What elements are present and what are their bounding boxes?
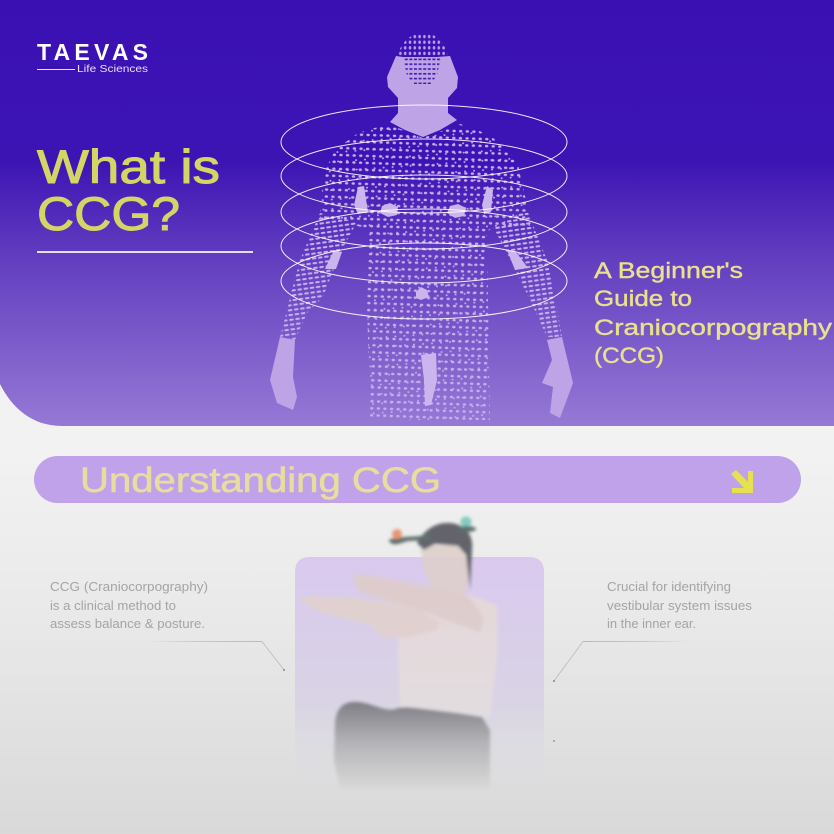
subtitle: Guide to	[594, 286, 692, 311]
left hand	[270, 337, 297, 410]
left description	[50, 580, 208, 631]
title	[37, 140, 220, 240]
pants	[334, 702, 490, 790]
subtitle: Craniocorpography	[594, 315, 833, 340]
woman wearing CCG headset	[298, 516, 498, 790]
human body point cloud	[270, 33, 573, 420]
logo: Taevas Life Sciences: Life Sciences	[77, 63, 148, 75]
orbit rings	[281, 105, 567, 319]
right arm dots	[493, 210, 562, 337]
teal sensor	[460, 516, 472, 528]
left leader line	[150, 642, 285, 671]
right description: vestibular system issues	[607, 599, 752, 613]
torso	[398, 595, 498, 717]
hair	[417, 523, 472, 590]
left description: assess balance & posture.	[50, 617, 205, 631]
right description	[607, 580, 752, 631]
right hand	[542, 337, 573, 418]
title: CCG?	[37, 187, 180, 240]
upper arm raised	[352, 574, 484, 632]
subtitle	[594, 258, 833, 368]
subtitle: (CCG)	[594, 343, 664, 368]
title underline	[37, 251, 253, 253]
panel: photo card	[295, 557, 544, 805]
face and neck	[420, 545, 472, 600]
hero panel	[0, 0, 834, 426]
solid patches	[325, 186, 528, 406]
headset base	[458, 526, 476, 532]
face dots	[403, 57, 441, 84]
orange sensor	[392, 529, 402, 539]
head and neck solid	[387, 56, 458, 137]
right description: Crucial for identifying	[607, 580, 731, 594]
icon: arrow	[731, 470, 753, 493]
logo: Taevas Life Sciences: TAEVAS	[37, 39, 148, 65]
head top dots	[397, 33, 448, 57]
right description: in the inner ear.	[607, 617, 696, 631]
left description: is a clinical method to	[50, 599, 176, 613]
title: What is	[37, 140, 220, 193]
torso dots	[320, 124, 530, 420]
left arm dots	[280, 213, 357, 340]
right leader line	[553, 642, 688, 742]
banner heading: Understanding CCG	[80, 461, 441, 500]
lower arm raised	[298, 596, 440, 638]
left description: CCG (Craniocorpography)	[50, 580, 208, 594]
headset arm	[389, 533, 430, 544]
section banner	[34, 456, 801, 503]
subtitle: A Beginner's	[594, 258, 743, 283]
